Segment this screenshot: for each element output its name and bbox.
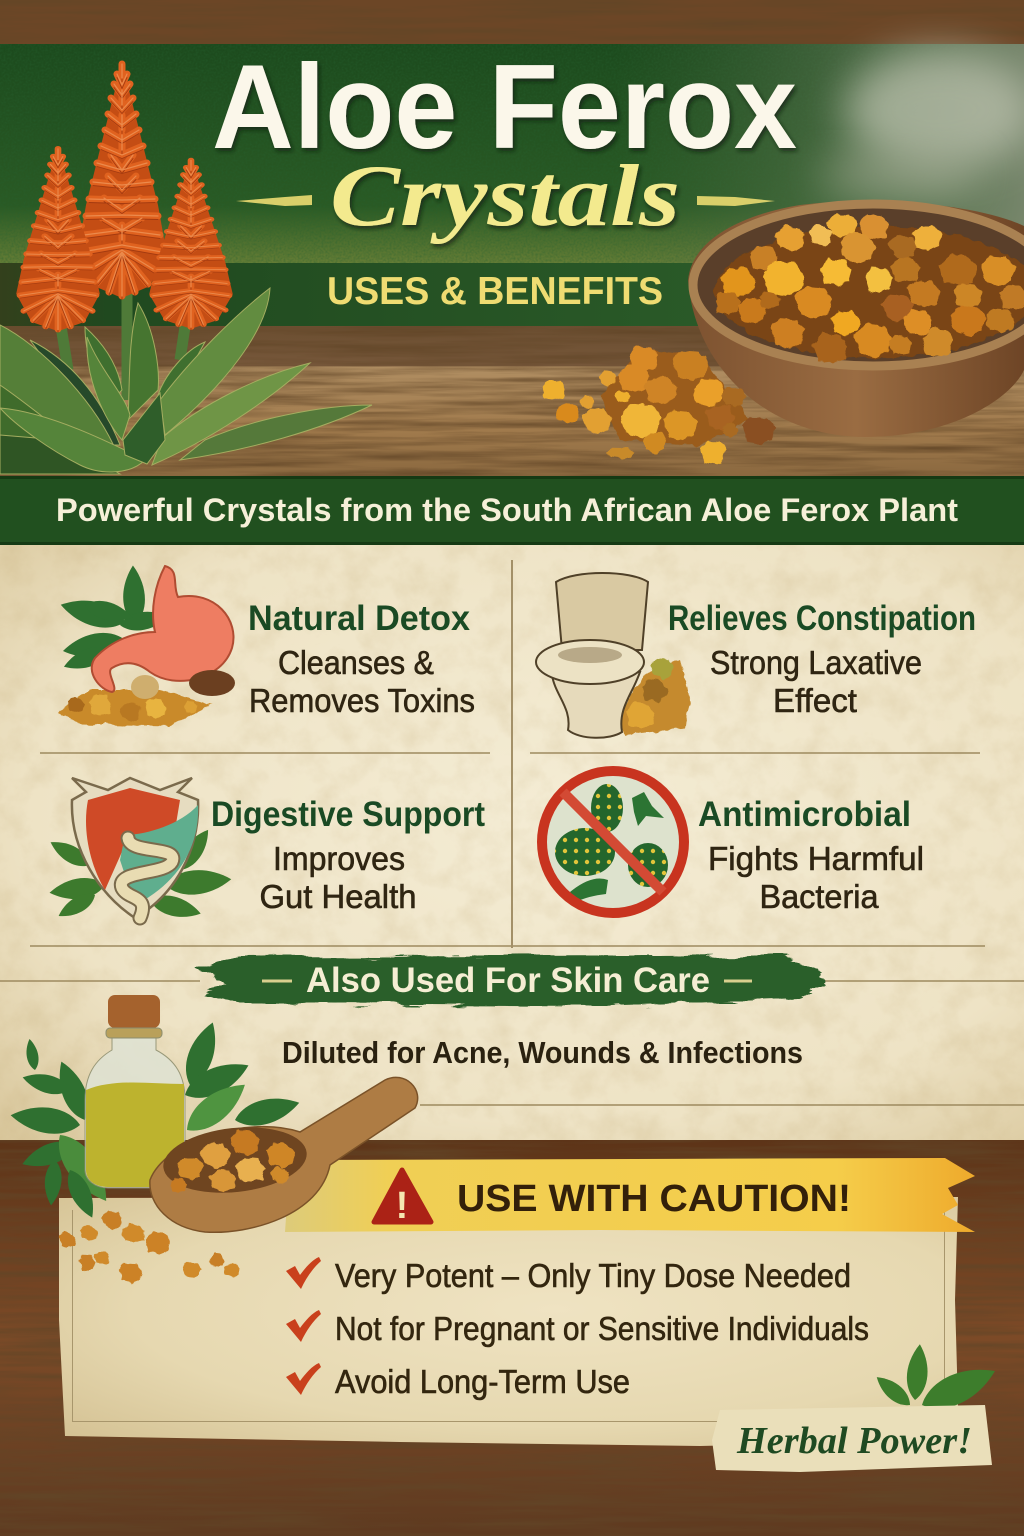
- icon: toilet: [536, 573, 690, 738]
- herb leaves: [9, 1018, 302, 1222]
- description: Gut Health: [260, 878, 416, 915]
- banner dashes: [262, 980, 752, 982]
- tagline band: Powerful Crystals from the South African Aloe Ferox Plant: [56, 492, 958, 528]
- wooden table behind products: [0, 325, 1024, 477]
- caution panel inner border: [72, 1210, 945, 1422]
- description: Effect: [773, 682, 857, 719]
- uses and benefits band: USES & BENEFITS: [327, 270, 663, 313]
- caution heading: USE WITH CAUTION!: [457, 1178, 851, 1220]
- brush stroke: [195, 955, 828, 1006]
- tagline band: [0, 476, 1024, 545]
- header green backdrop: [0, 44, 1024, 269]
- bottom wood background: [0, 1140, 1024, 1536]
- description: [260, 840, 416, 915]
- feature: natural detox: [58, 565, 475, 726]
- flower stalks: [60, 280, 186, 400]
- tag text: Herbal Power!: [736, 1420, 972, 1462]
- feature: digestive support: [46, 778, 485, 923]
- heading: Natural Detox: [248, 599, 471, 638]
- background: top wood strip: [0, 0, 1024, 50]
- description: [710, 644, 922, 719]
- caution banner: [285, 1158, 975, 1232]
- bowl of aloe crystals: [542, 201, 1024, 464]
- aloe leaves: [0, 288, 372, 474]
- heading: Antimicrobial: [698, 795, 911, 834]
- bowl rim: [693, 204, 1024, 366]
- icon: shield with intestine: [46, 778, 232, 923]
- decorative flourish right: [697, 196, 775, 206]
- parchment section: [0, 545, 1024, 1142]
- warning triangle: !: [396, 1185, 408, 1227]
- caution paper panel: [59, 1197, 959, 1447]
- icon: stomach with herbs: [58, 565, 235, 726]
- description: Bacteria: [760, 878, 879, 915]
- herbal power badge: [712, 1343, 1001, 1472]
- warning triangle: [374, 1170, 431, 1227]
- feature: antimicrobial: [542, 771, 924, 915]
- skin care banner: [195, 955, 828, 1006]
- description: [249, 644, 475, 719]
- icon: no bacteria sign: [542, 771, 684, 913]
- description: Improves: [273, 840, 405, 877]
- orange flower spikes: [16, 64, 233, 332]
- glass bottle: [85, 995, 185, 1188]
- decorative flourish left: [236, 195, 312, 206]
- feature: relieves constipation: [536, 573, 976, 738]
- description: Removes Toxins: [249, 682, 475, 719]
- leaves: [872, 1343, 1001, 1418]
- description: Fights Harmful: [708, 840, 924, 877]
- skin care description: Diluted for Acne, Wounds & Infections: [282, 1035, 803, 1070]
- loose crystals on table: [542, 346, 774, 464]
- title: Aloe Ferox: [212, 40, 797, 174]
- subtitle: Crystals: Crystals: [330, 148, 680, 245]
- wooden bowl: [688, 201, 1024, 437]
- description: Strong Laxative: [710, 644, 922, 681]
- scattered crystals: [59, 1212, 239, 1283]
- tag: [712, 1405, 992, 1472]
- description: [708, 840, 924, 915]
- caution list: [286, 1257, 869, 1400]
- title: [212, 40, 797, 245]
- heading: Digestive Support: [211, 795, 485, 834]
- item 1: Very Potent – Only Tiny Dose Needed: [335, 1257, 851, 1294]
- uses and benefits band: [0, 263, 720, 326]
- wooden spoon: [150, 1077, 418, 1232]
- description: Cleanses &: [278, 644, 434, 681]
- aloe ferox plant illustration: [0, 64, 372, 474]
- crystals in bowl: [714, 213, 1024, 364]
- item 2: Not for Pregnant or Sensitive Individuals: [335, 1310, 869, 1347]
- skin care herbs, bottle and spoon: [9, 995, 418, 1283]
- heading: Relieves Constipation: [668, 599, 976, 638]
- yellow ribbon: [285, 1158, 975, 1232]
- banner text: Also Used For Skin Care: [306, 961, 710, 1000]
- item 3: Avoid Long-Term Use: [335, 1363, 630, 1400]
